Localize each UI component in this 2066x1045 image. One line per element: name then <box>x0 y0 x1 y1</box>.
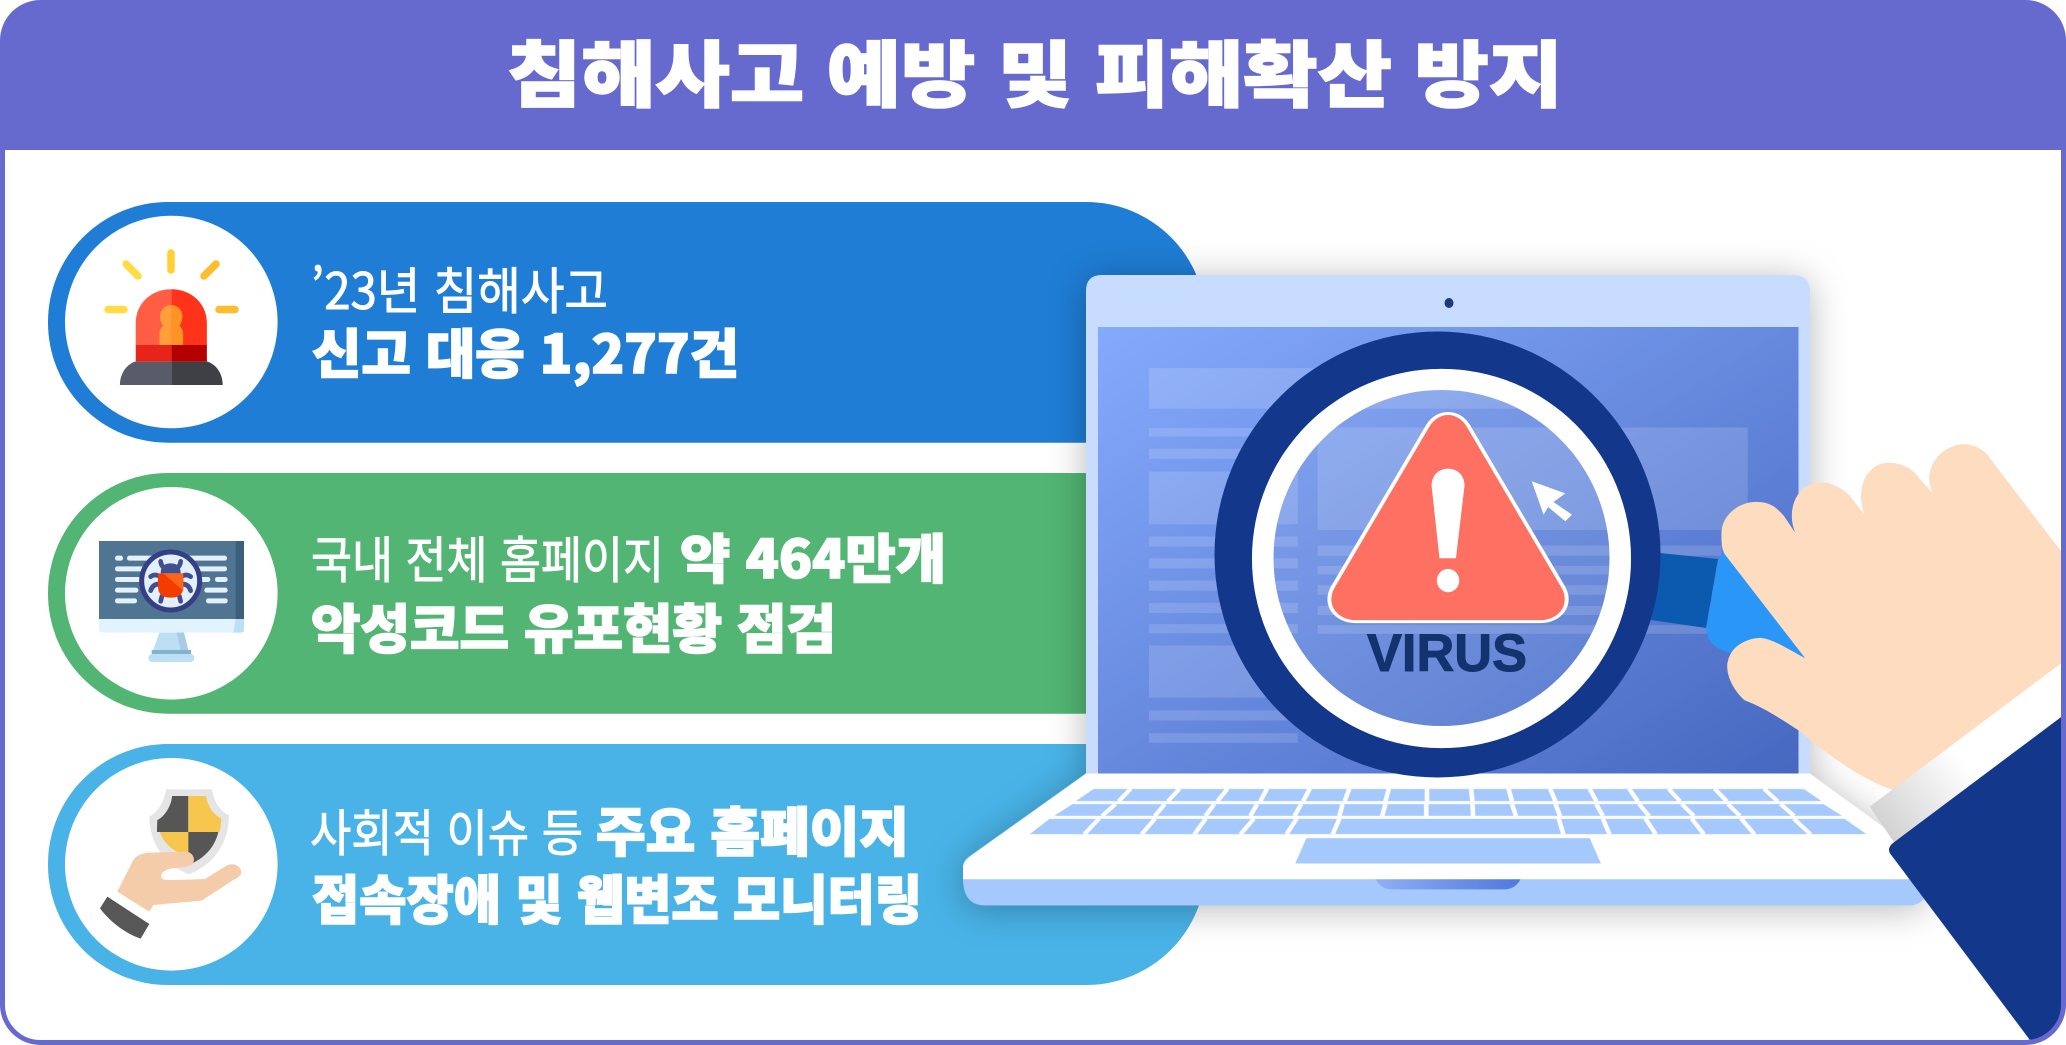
screen page mockup <box>1149 368 1748 743</box>
illustration: laptop <box>963 275 1926 906</box>
text: homepage monitoring: 주요 홈페이지 <box>596 791 909 867</box>
text: incident response <box>312 264 736 387</box>
icon: warning triangle <box>1329 414 1567 622</box>
webcam <box>1444 298 1454 308</box>
text: malware scan: 약 464만개 <box>680 518 946 594</box>
white ring <box>1252 369 1631 748</box>
icon: siren <box>108 253 235 385</box>
text: malware scan <box>312 532 943 654</box>
label: VIRUS: VIRUS <box>1367 624 1527 683</box>
text: incident response: 신고 대응 1,277건 <box>312 313 739 389</box>
title: 침해사고 예방 및 피해확산 방지 <box>507 17 1563 122</box>
text: homepage monitoring: 접속장애 및 웹변조 모니터링 <box>312 859 922 935</box>
laptop base <box>963 774 1926 906</box>
illustration: hand holding magnifier <box>1706 444 2066 1045</box>
icon: cursor arrow <box>1532 481 1572 521</box>
shirt cuff <box>1870 659 2066 843</box>
text: homepage monitoring <box>311 805 918 926</box>
hand <box>1721 444 2066 790</box>
navy ring <box>1214 332 1660 778</box>
magnifier handle <box>1651 553 1718 628</box>
panel: incident response <box>48 202 1206 443</box>
suit sleeve <box>1889 712 2066 1045</box>
text: malware scan: 악성코드 유포현황 점검 <box>311 588 836 664</box>
keyboard <box>1030 789 1866 834</box>
icon: hand holding shield <box>100 789 241 939</box>
icon: monitor with bug <box>99 541 244 662</box>
lens tint <box>1272 388 1612 728</box>
text: incident response: ’23년 침해사고 <box>311 252 608 324</box>
text: malware scan: 국내 전체 홈페이지 <box>311 521 664 593</box>
header band <box>0 0 2066 150</box>
text: homepage monitoring: 사회적 이슈 등 <box>310 794 583 866</box>
panel: malware scan <box>48 473 1086 714</box>
laptop screen <box>1098 327 1798 774</box>
magnifying glass <box>1214 332 1660 778</box>
hinge notch <box>1376 879 1521 889</box>
trackpad <box>1295 838 1601 863</box>
laptop lid <box>1086 275 1810 774</box>
panel: homepage monitoring <box>48 744 1206 985</box>
handle grip <box>1706 549 1807 658</box>
